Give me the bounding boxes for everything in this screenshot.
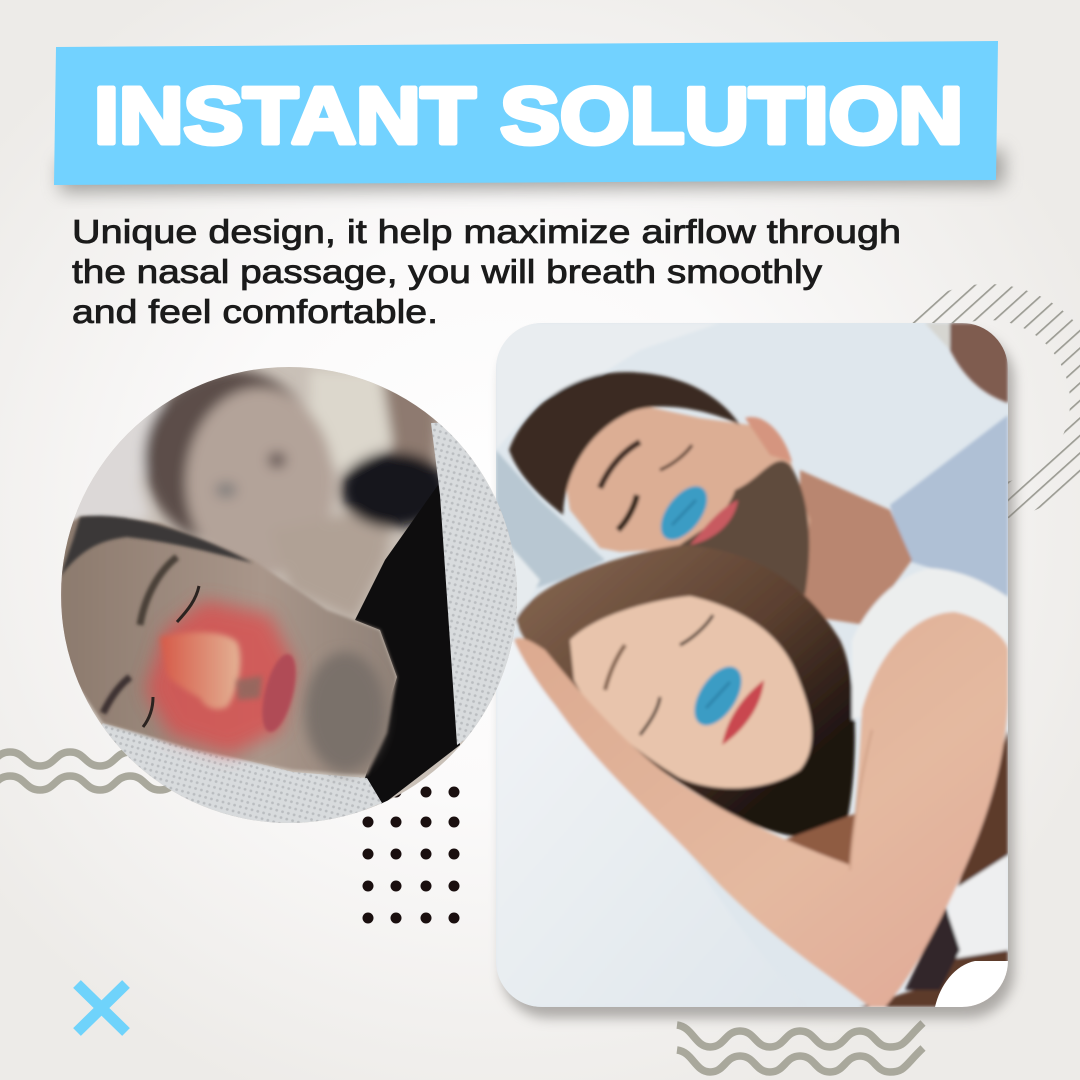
dark bedding right <box>860 730 1008 1007</box>
man's nose clip <box>659 484 709 542</box>
waffle blanket <box>431 420 525 745</box>
white corner patch <box>935 961 1008 1007</box>
description text: and feel comfortable. <box>72 293 438 330</box>
red inflammation <box>145 600 295 755</box>
description text: Unique design, it help maximize airflow through <box>72 213 901 250</box>
mouth shadow <box>236 676 262 700</box>
man's head <box>60 516 397 775</box>
decoration: dot grid <box>362 786 460 924</box>
blurred background <box>60 365 449 620</box>
title banner <box>54 41 998 185</box>
man's arm <box>784 812 857 866</box>
decoration: bottom wavy lines <box>677 1023 923 1072</box>
description text <box>72 213 901 330</box>
woman's top <box>852 568 1008 720</box>
woman's hair <box>516 545 855 837</box>
photo shadow <box>502 334 1014 1018</box>
description text: the nasal passage, you will breath smoothly <box>72 253 823 290</box>
title: INSTANT SOLUTION <box>94 71 963 160</box>
woman's nose clip <box>692 664 744 728</box>
photo: couple sleeping with nose clips <box>496 323 1008 1007</box>
hair <box>60 516 253 577</box>
nose <box>160 632 240 709</box>
decoration: left wavy lines <box>0 752 190 790</box>
icon: blue cross <box>77 984 126 1032</box>
waffle pillow <box>102 723 382 823</box>
woman's arm <box>514 612 1008 1007</box>
pillow lower left <box>496 640 682 1007</box>
black shirt <box>355 485 460 805</box>
woman's face <box>570 596 812 788</box>
banner shadow <box>60 150 1004 192</box>
lips <box>262 653 298 733</box>
decoration: striped arc <box>888 302 1080 502</box>
photo: snoring man in circle <box>60 365 525 835</box>
man <box>509 372 912 625</box>
